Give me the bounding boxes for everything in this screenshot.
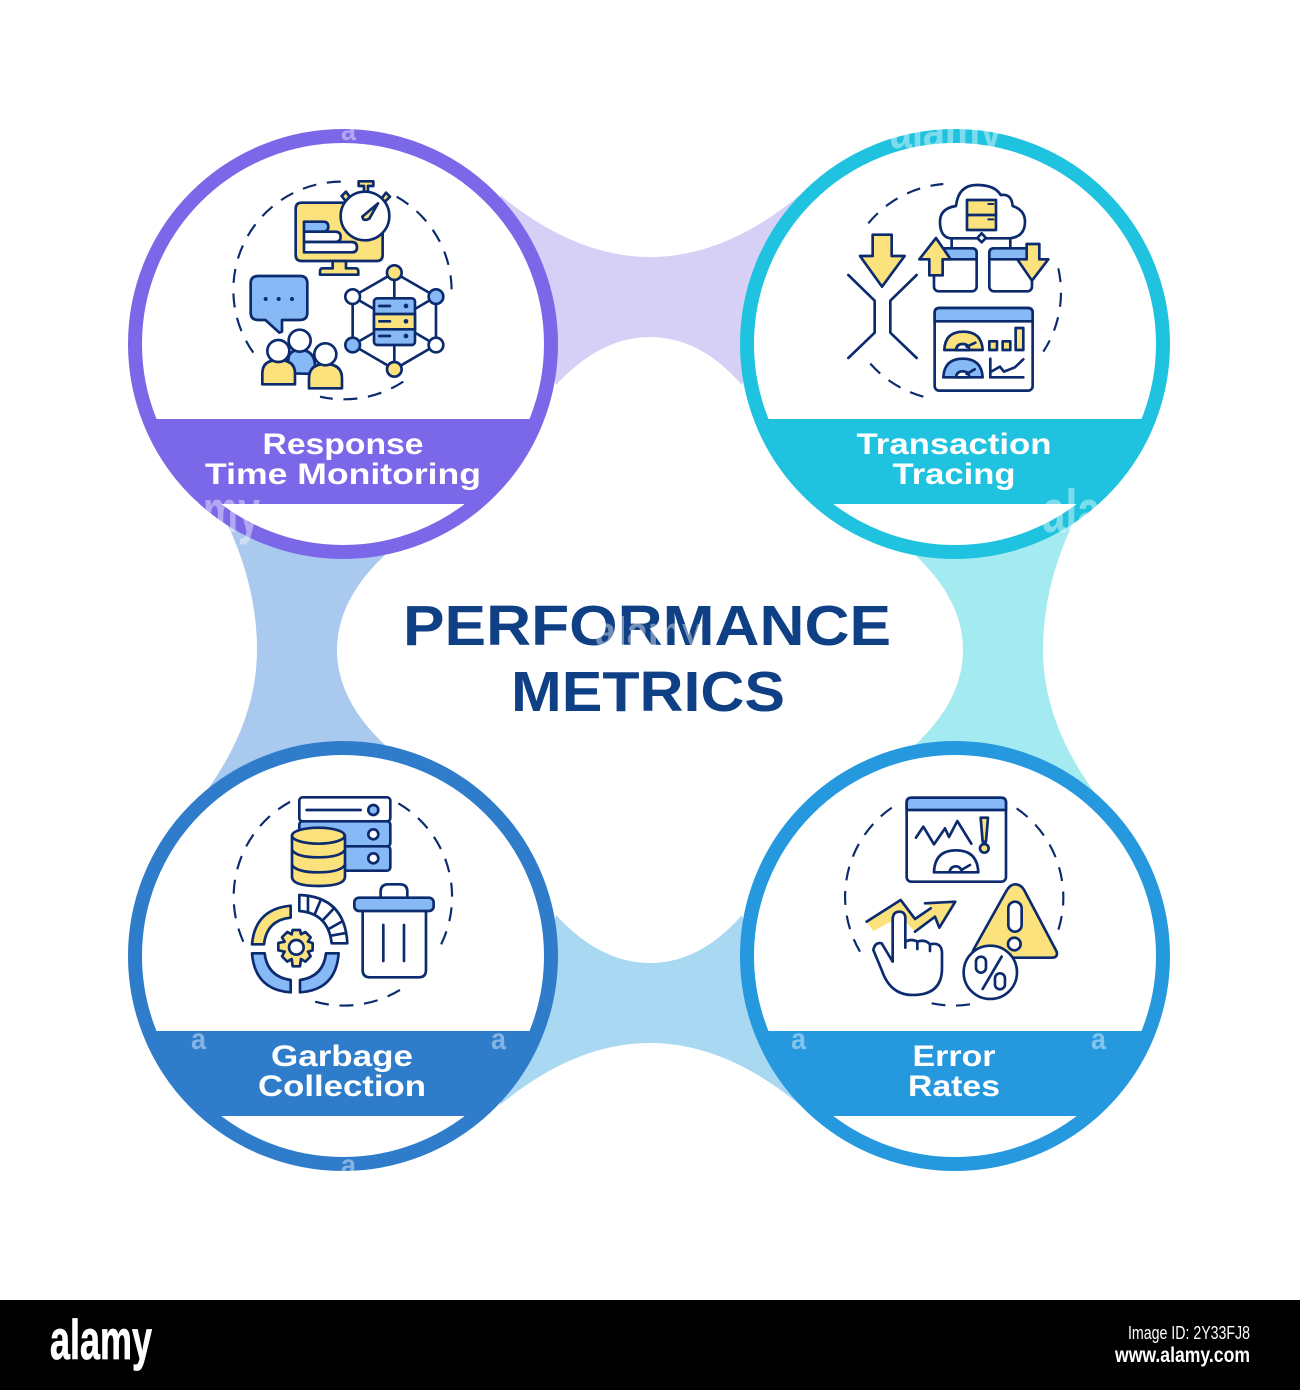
label band: Error Rates: Rates <box>908 1070 1000 1103</box>
connector: right cyan <box>915 500 1100 800</box>
panel: Error Rates <box>732 748 1178 1164</box>
title: PERFORMANCE <box>403 594 891 658</box>
footer bar <box>0 1300 1300 1390</box>
panel: Transaction Tracing <box>732 136 1178 552</box>
label band: Error Rates <box>768 1031 1142 1116</box>
panel: Response Time Monitoring <box>120 136 566 552</box>
label band: Transaction Tracing: Tracing <box>892 458 1016 491</box>
connector: left blue <box>200 500 385 800</box>
title: METRICS <box>511 660 785 724</box>
icon: garbage collection <box>234 797 452 1006</box>
watermarks: alamy <box>148 478 260 545</box>
label band: Garbage Collection: Garbage <box>271 1040 413 1073</box>
watermarks: a <box>791 1023 806 1056</box>
title <box>403 594 891 724</box>
footer logo: alamy <box>50 1308 152 1371</box>
label band: Garbage Collection <box>156 1031 530 1116</box>
connector: top purple <box>500 195 800 385</box>
label band: Response Time Monitoring: Response <box>262 428 424 461</box>
watermarks: a <box>341 1149 356 1182</box>
watermarks: alamy <box>595 610 704 654</box>
watermarks: alamy <box>1042 478 1162 545</box>
label band: Error Rates: Error <box>912 1040 996 1073</box>
icon: error rates <box>845 798 1063 1006</box>
label band: Response Time Monitoring <box>156 419 530 504</box>
label band: Transaction Tracing: Transaction <box>856 428 1052 461</box>
watermarks: a <box>1091 1023 1106 1056</box>
label band: Garbage Collection: Collection <box>258 1070 426 1103</box>
watermarks: alamy <box>890 103 1002 159</box>
watermarks: a <box>491 1023 506 1056</box>
label band: Transaction Tracing <box>768 419 1142 504</box>
label band: Response Time Monitoring: Time Monitoring <box>205 458 481 491</box>
footer image id: Image ID: 2Y33FJ8 <box>1128 1323 1250 1343</box>
panel: Garbage Collection <box>120 748 566 1164</box>
watermarks: a <box>191 1023 206 1056</box>
footer url: www.alamy.com <box>1114 1344 1250 1367</box>
connector: bottom light blue <box>500 915 800 1105</box>
watermarks <box>148 103 1162 1182</box>
icon: response time monitoring <box>233 181 452 399</box>
watermarks: a <box>341 114 356 147</box>
icon: transaction tracing <box>848 184 1061 397</box>
